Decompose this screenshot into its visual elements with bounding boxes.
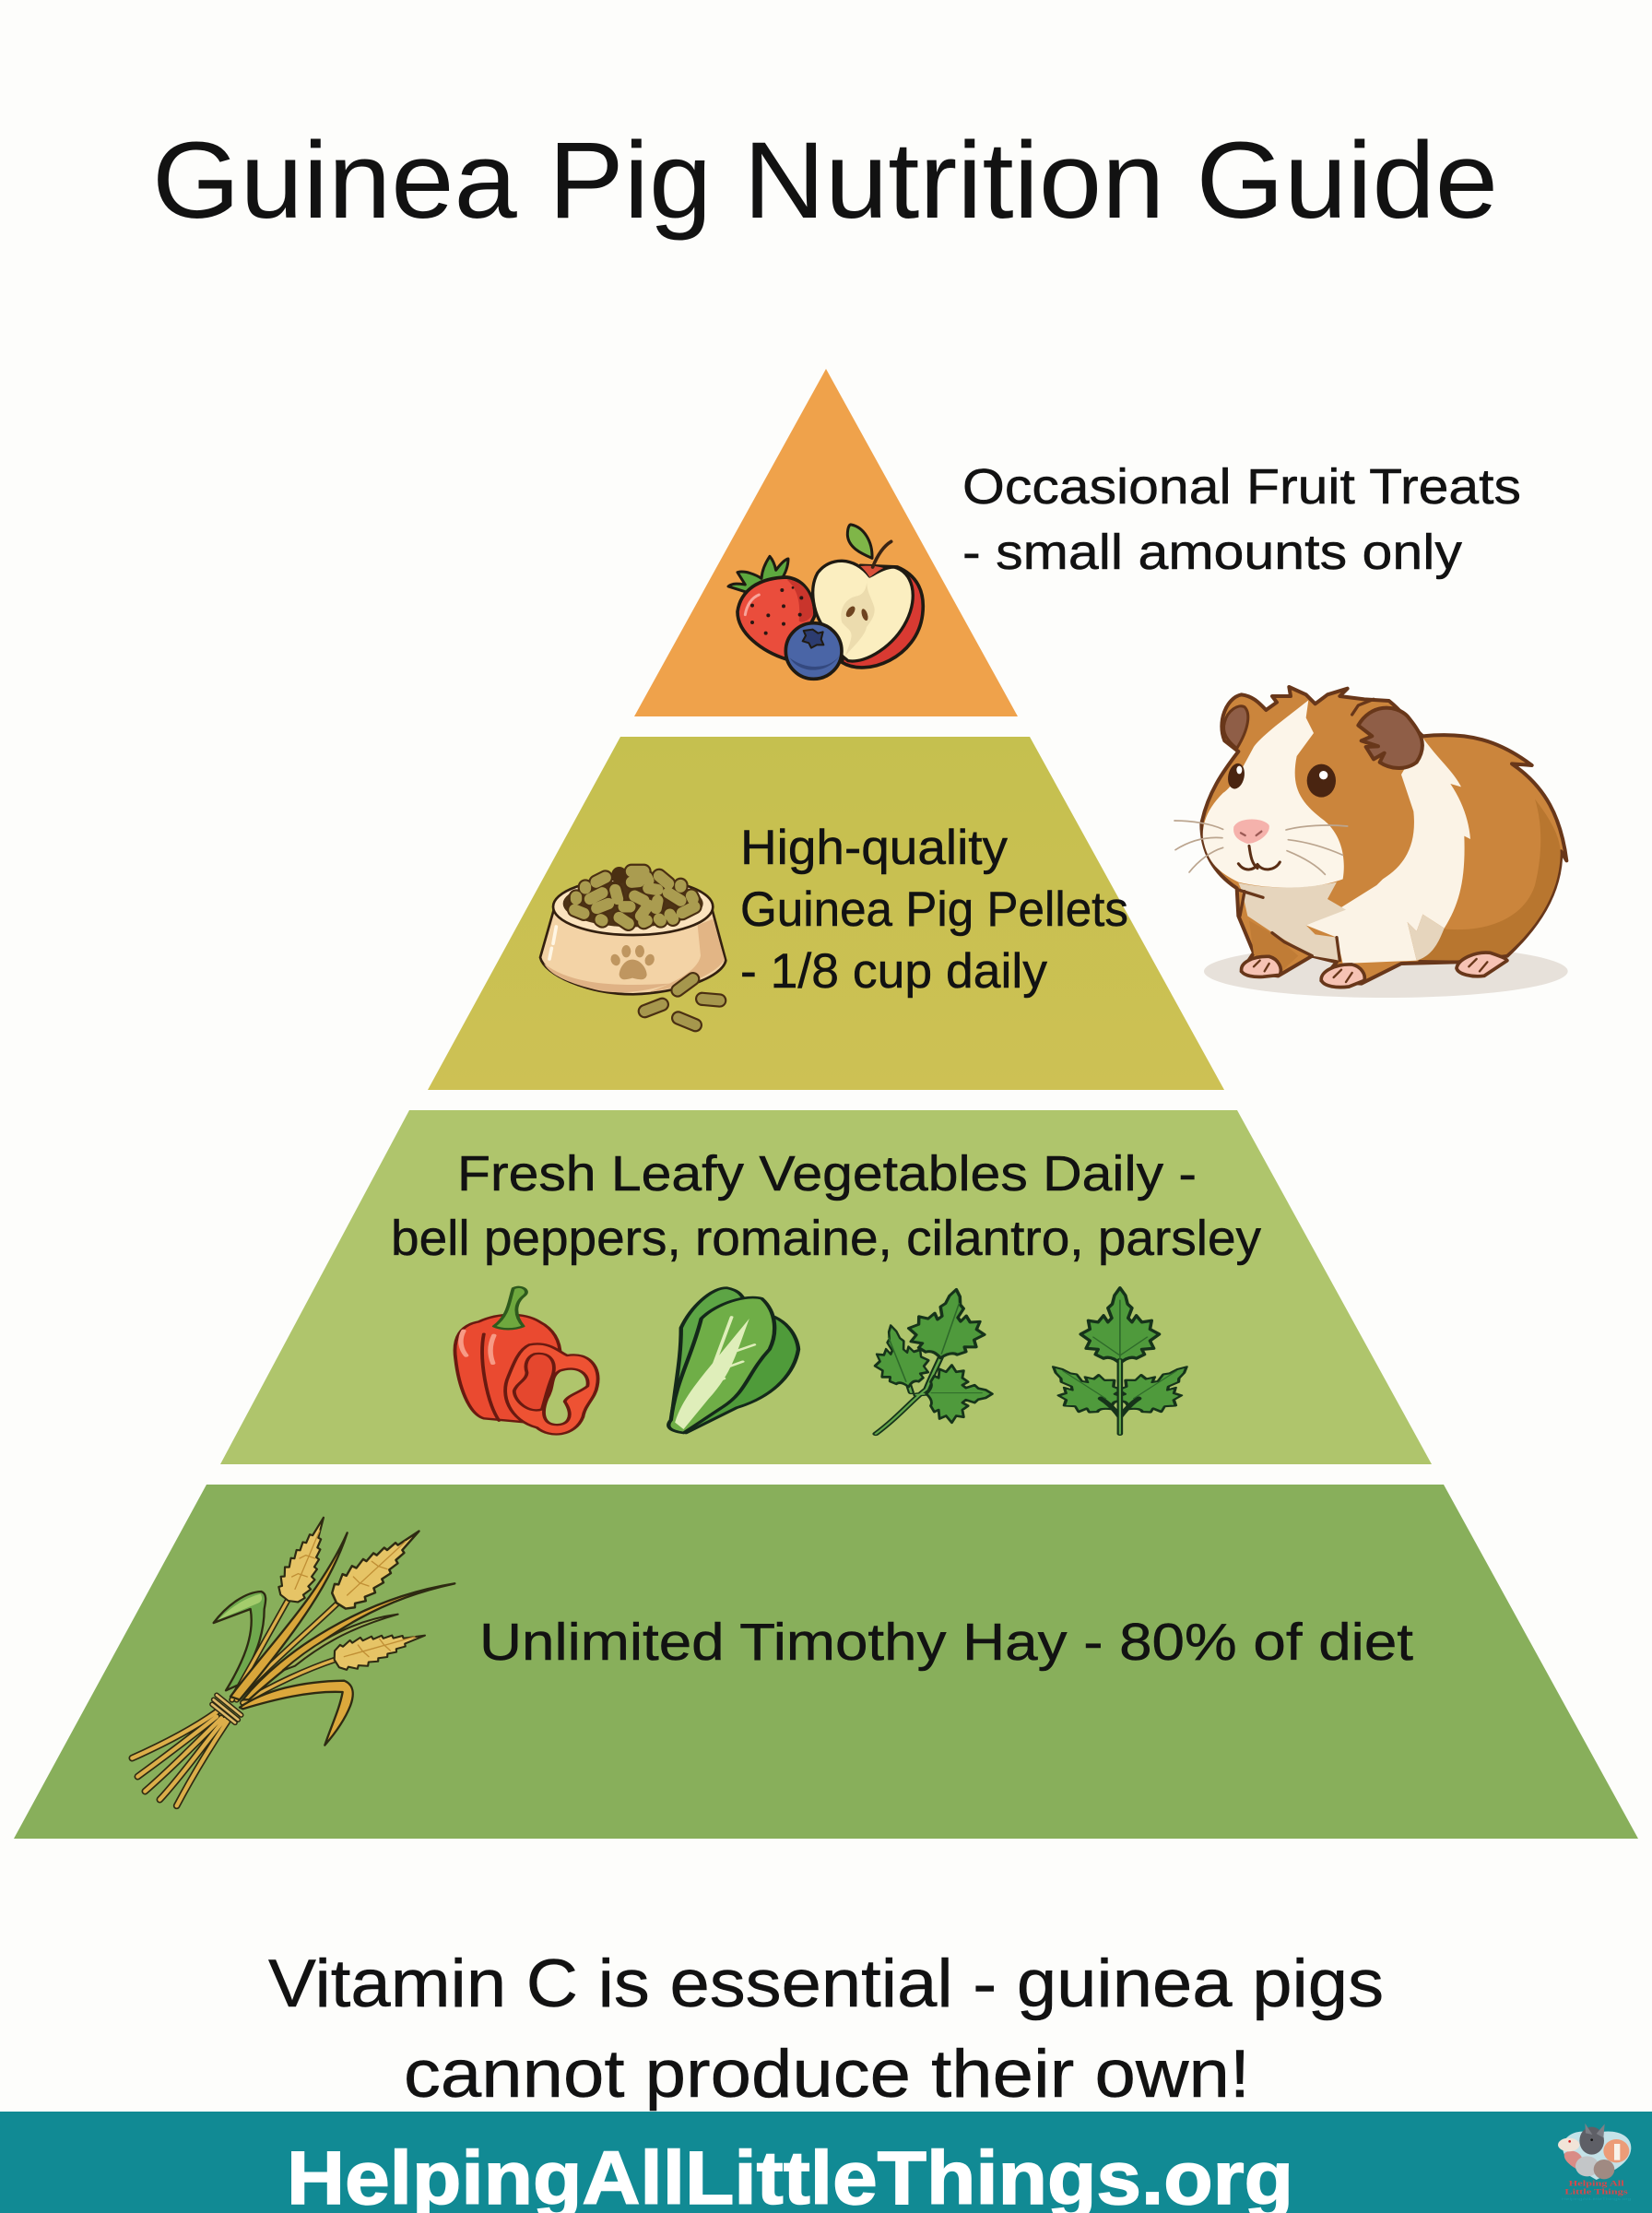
tier shape: orange triangle xyxy=(634,369,1018,716)
label: timothy hay: Unlimited Timothy Hay - 80% of diet xyxy=(479,1613,1413,1672)
logo: HelpingAllLittleThings.org xyxy=(1562,2197,1631,2201)
footer banner xyxy=(0,2112,1652,2213)
label: pellets: Guinea Pig Pellets xyxy=(740,882,1128,937)
panel: timothy hay tier xyxy=(14,1485,1638,1839)
lower body shading xyxy=(1417,799,1561,961)
icon: parsley sprig xyxy=(1028,1288,1211,1434)
icon: red bell pepper xyxy=(454,1287,598,1435)
feet xyxy=(1242,953,1507,988)
front left leg xyxy=(1249,920,1298,973)
logo: Helping All xyxy=(1569,2178,1625,2187)
banner background xyxy=(0,2112,1652,2213)
label: pellets: High-quality xyxy=(740,821,1009,875)
icon: strawberry, apple and blueberry xyxy=(728,525,923,679)
panel: fruit treats tier xyxy=(634,369,1521,716)
outline lines xyxy=(1238,699,1457,962)
whiskers xyxy=(1174,821,1348,874)
label: vegetables: Fresh Leafy Vegetables Daily - xyxy=(457,1146,1197,1201)
logo xyxy=(1558,2124,1631,2201)
callout: vitamin C note: Vitamin C is essential - guinea pigs xyxy=(268,1947,1384,2021)
logo: Little Things xyxy=(1564,2187,1629,2196)
icon: cilantro sprig xyxy=(864,1286,994,1434)
ear left xyxy=(1223,706,1248,749)
callout: vitamin C note: cannot produce their own! xyxy=(404,2037,1250,2112)
label: fruit treats: - small amounts only xyxy=(962,525,1462,580)
eyes xyxy=(1307,764,1336,798)
shadow under guinea pig xyxy=(1204,945,1568,998)
label: pellets xyxy=(740,821,1128,999)
tier shape: green trapezoid xyxy=(14,1485,1638,1839)
label: pellets: - 1/8 cup daily xyxy=(740,944,1047,999)
white collar band xyxy=(1306,738,1470,964)
label: fruit treats: Occasional Fruit Treats xyxy=(962,459,1521,515)
icons: vegetables row xyxy=(454,1286,1211,1435)
illustration: guinea pig xyxy=(1174,687,1568,998)
title: Guinea Pig Nutrition Guide xyxy=(152,120,1498,242)
panel: vegetables tier xyxy=(220,1110,1432,1464)
label: vegetables xyxy=(391,1146,1261,1266)
ear right xyxy=(1358,708,1422,768)
nose and mouth xyxy=(1233,819,1269,844)
panel: pellets tier xyxy=(428,737,1224,1090)
tier shape: light green trapezoid xyxy=(220,1110,1432,1464)
label: fruit treats xyxy=(962,459,1521,580)
tier shape: olive trapezoid xyxy=(428,737,1224,1090)
icon: romaine lettuce xyxy=(668,1288,798,1433)
white face blaze xyxy=(1203,700,1344,888)
label: vegetables: bell peppers, romaine, cilantro, parsley xyxy=(391,1211,1261,1266)
body silhouette xyxy=(1201,687,1566,984)
callout: vitamin C note xyxy=(268,1947,1384,2112)
chest shading xyxy=(1238,882,1346,961)
icon: bowl of pellets xyxy=(540,871,726,1025)
icon: hay bundle xyxy=(132,1511,454,1805)
